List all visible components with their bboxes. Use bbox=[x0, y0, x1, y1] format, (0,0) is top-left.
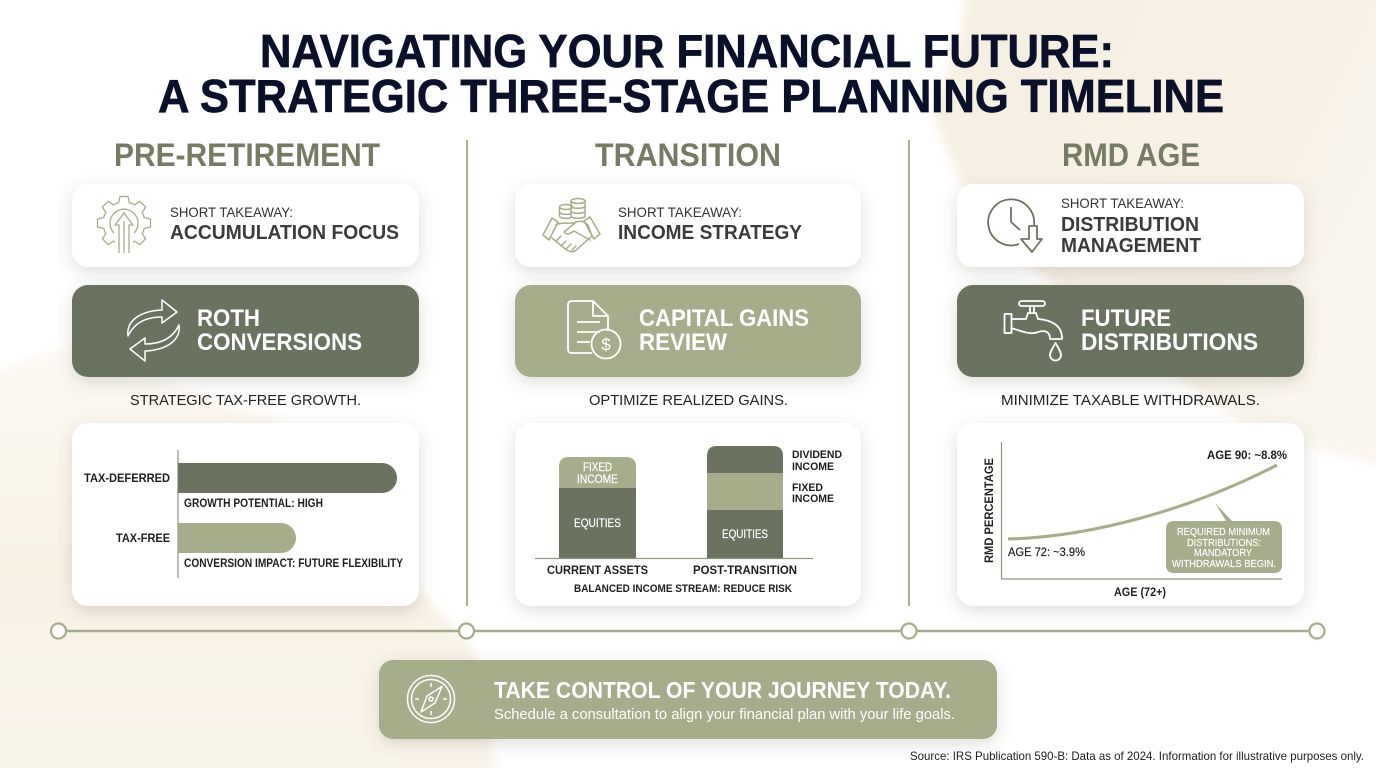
bar: tax-free bbox=[178, 523, 296, 553]
bar labels: GROWTH POTENTIAL: HIGH bbox=[184, 498, 323, 510]
chart labels: FIXED bbox=[792, 482, 823, 494]
bar labels: CONVERSION IMPACT: FUTURE FLEXIBILITY bbox=[184, 558, 403, 570]
bar labels bbox=[84, 471, 403, 570]
text: takeaway income strategy bbox=[618, 204, 803, 244]
text: roth conversions: ROTH bbox=[197, 305, 260, 332]
bar: current assets bbox=[559, 457, 636, 558]
axis and point labels: RMD PERCENTAGE bbox=[982, 458, 996, 563]
callout: REQUIRED MINIMUM bbox=[1177, 527, 1270, 538]
line chart: RMD percentage bbox=[957, 423, 1304, 606]
text: capital gains review: REVIEW bbox=[639, 329, 727, 356]
text: takeaway accumulation focus: SHORT TAKEAWAY: bbox=[170, 204, 293, 220]
title: NAVIGATING YOUR FINANCIAL FUTURE: bbox=[260, 25, 1114, 77]
icon: document with dollar: $ bbox=[601, 335, 611, 354]
bar: current assets: EQUITIES bbox=[574, 518, 621, 530]
curve bbox=[1008, 465, 1277, 539]
stacked bar chart: asset mix bbox=[515, 423, 861, 606]
text: takeaway accumulation focus: ACCUMULATION FOCUS bbox=[170, 222, 399, 244]
chart labels: DIVIDEND bbox=[792, 449, 842, 461]
axis and point labels: AGE 72: ~3.9% bbox=[1008, 545, 1085, 559]
stage headings: TRANSITION bbox=[595, 137, 781, 173]
text: call to action: TAKE CONTROL OF YOUR JOURNEY TODAY. bbox=[494, 677, 951, 703]
text: future distributions bbox=[1081, 305, 1258, 356]
icon: gear with up arrow bbox=[98, 196, 150, 253]
callout: WITHDRAWALS BEGIN. bbox=[1172, 559, 1276, 570]
bar: tax-deferred bbox=[178, 463, 397, 493]
text: takeaway distribution management bbox=[1061, 195, 1201, 257]
bar: post-transition bbox=[707, 446, 783, 558]
bar chart: tax treatment bbox=[72, 423, 419, 606]
text: stage descriptions: MINIMIZE TAXABLE WITHDRAWALS. bbox=[1001, 392, 1260, 409]
text: roth conversions bbox=[197, 305, 362, 356]
text: takeaway accumulation focus bbox=[170, 204, 399, 244]
chart labels: CURRENT ASSETS bbox=[547, 563, 648, 577]
text: call to action: Schedule a consultation to align your financial plan with your life goals. bbox=[494, 706, 955, 723]
title: A STRATEGIC THREE-STAGE PLANNING TIMELINE bbox=[158, 70, 1224, 122]
bar labels: TAX-DEFERRED bbox=[84, 471, 170, 485]
stage headings: RMD AGE bbox=[1062, 137, 1200, 173]
text: takeaway distribution management: DISTRIBUTION bbox=[1061, 214, 1199, 236]
panel: pre-retirement takeaway bbox=[72, 184, 419, 267]
text: call to action bbox=[494, 677, 955, 723]
icon: document with dollar bbox=[568, 301, 620, 358]
source note: Source: IRS Publication 590-B: Data as of 2024. Information for illustrative purposes only. bbox=[910, 749, 1364, 763]
icon: circular arrows bbox=[128, 300, 179, 361]
text: takeaway distribution management: SHORT TAKEAWAY: bbox=[1061, 195, 1184, 211]
text: capital gains review bbox=[639, 305, 809, 356]
chart labels: INCOME bbox=[792, 493, 834, 505]
text: future distributions: DISTRIBUTIONS bbox=[1081, 329, 1258, 356]
icon: clock with down arrow bbox=[988, 199, 1042, 252]
stage headings bbox=[114, 137, 1200, 173]
timeline bbox=[51, 624, 1324, 638]
axis and point labels bbox=[982, 448, 1287, 599]
icon: handshake with coins bbox=[543, 198, 600, 252]
text: capital gains review: CAPITAL GAINS bbox=[639, 305, 809, 332]
panel: transition takeaway bbox=[515, 184, 861, 267]
bar: current assets: FIXED bbox=[583, 462, 612, 474]
bar labels: TAX-FREE bbox=[116, 531, 170, 545]
text: stage descriptions: OPTIMIZE REALIZED GAINS. bbox=[589, 392, 788, 409]
stage headings: PRE-RETIREMENT bbox=[114, 137, 380, 173]
bar: post-transition: EQUITIES bbox=[722, 529, 768, 541]
text: stage descriptions: STRATEGIC TAX-FREE GROWTH. bbox=[130, 392, 361, 409]
text: takeaway income strategy: INCOME STRATEGY bbox=[618, 222, 803, 244]
panel: capital gains review bbox=[515, 285, 861, 377]
callout: DISTRIBUTIONS: bbox=[1187, 538, 1261, 549]
chart labels bbox=[547, 449, 842, 595]
chart labels: INCOME bbox=[792, 461, 834, 473]
icon: compass bbox=[408, 676, 454, 722]
axis and point labels: AGE (72+) bbox=[1114, 585, 1166, 599]
text: takeaway distribution management: MANAGEMENT bbox=[1061, 235, 1201, 257]
panel: RMD takeaway bbox=[957, 184, 1304, 267]
chart labels: POST-TRANSITION bbox=[693, 563, 797, 577]
axis and point labels: AGE 90: ~8.8% bbox=[1207, 448, 1287, 462]
bar: current assets: INCOME bbox=[577, 474, 618, 486]
chart labels: BALANCED INCOME STREAM: REDUCE RISK bbox=[574, 583, 792, 595]
panel: roth conversions bbox=[72, 285, 419, 377]
text: future distributions: FUTURE bbox=[1081, 305, 1171, 332]
text: stage descriptions bbox=[130, 392, 1260, 409]
callout bbox=[1166, 503, 1282, 573]
title bbox=[158, 25, 1224, 122]
panel: future distributions bbox=[957, 285, 1304, 377]
text: roth conversions: CONVERSIONS bbox=[197, 329, 362, 356]
icon: faucet with drop bbox=[1004, 301, 1062, 360]
text: takeaway income strategy: SHORT TAKEAWAY: bbox=[618, 204, 742, 220]
call to action bbox=[379, 660, 997, 739]
callout: MANDATORY bbox=[1194, 548, 1252, 559]
